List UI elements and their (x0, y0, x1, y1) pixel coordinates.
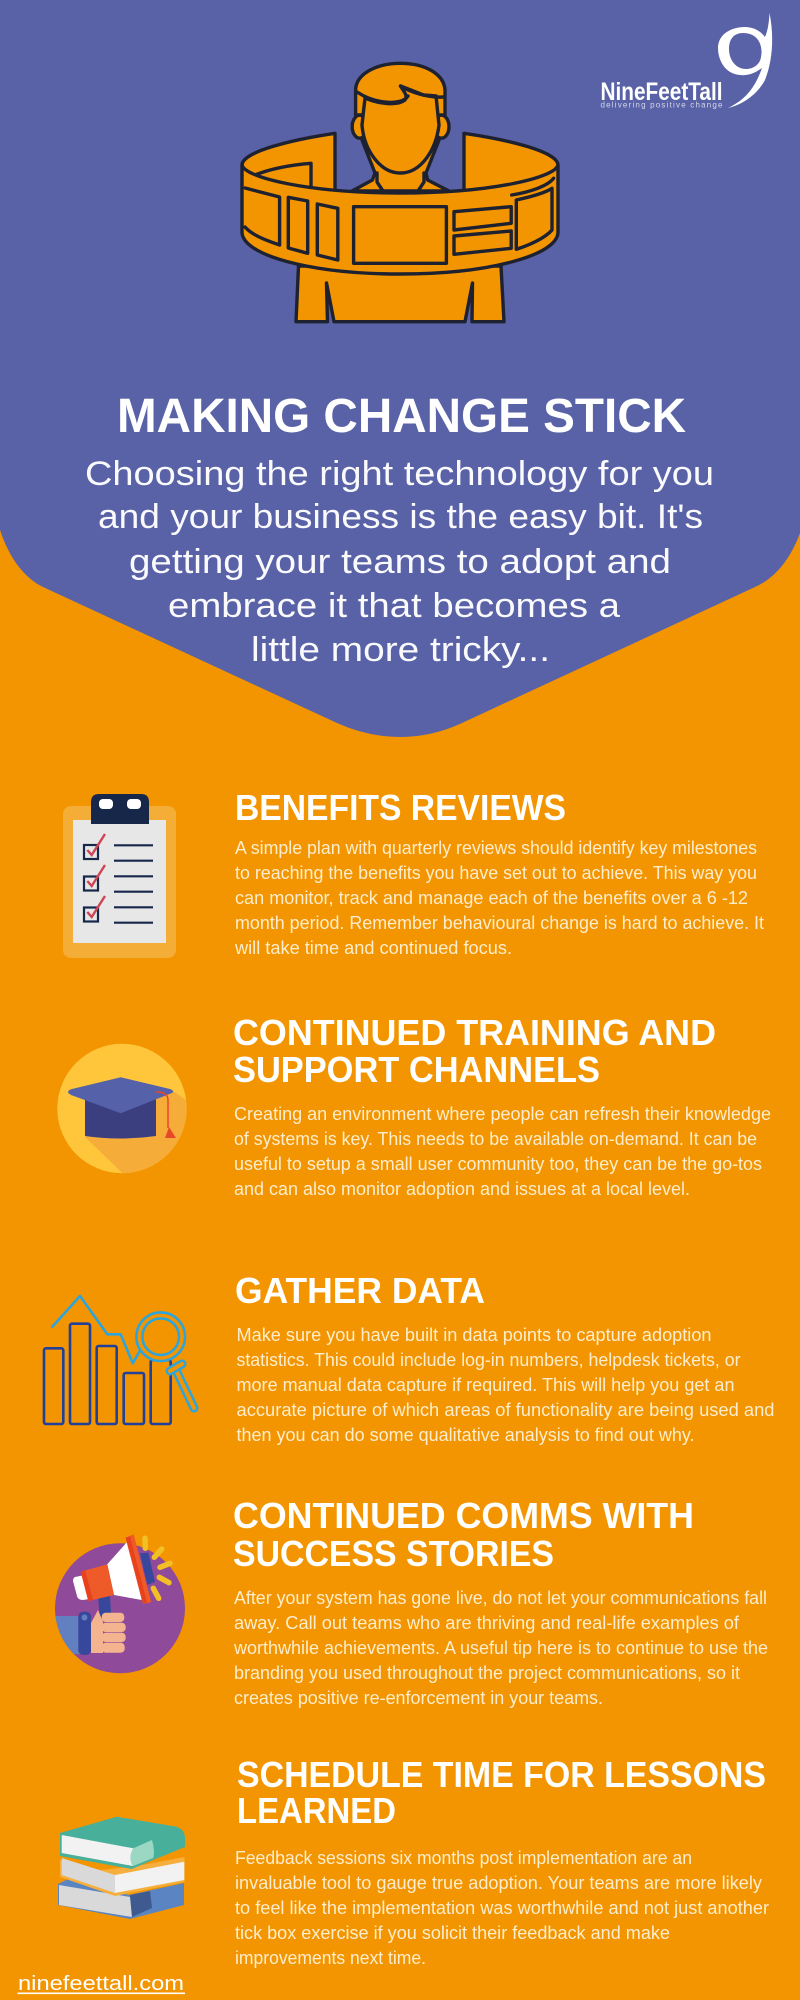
body text: accurate picture of which areas of functionality are being used and (236, 1400, 774, 1420)
panel: schedule time for lessons learned (58, 1754, 769, 1968)
body text: useful to setup a small user community too, they can be the go-tos (234, 1154, 762, 1174)
heading: SUPPORT CHANNELS (233, 1049, 600, 1090)
body text: more manual data capture if required. This will help you get an (236, 1375, 734, 1395)
panel: gather data (44, 1270, 774, 1445)
body text: will take time and continued focus. (234, 938, 512, 958)
body text: away. Call out teams who are thriving and real-life examples of (234, 1613, 740, 1633)
body text: of systems is key. This needs to be available on-demand. It can be (234, 1129, 757, 1149)
body text: invaluable tool to gauge true adoption. Your teams are more likely (235, 1873, 762, 1893)
body text: then you can do some qualitative analysis to find out why. (236, 1425, 694, 1445)
body text: Make sure you have built in data points to capture adoption (236, 1325, 712, 1345)
body text: month period. Remember behavioural change is hard to achieve. It (235, 913, 764, 933)
panel: hero header shape (0, 0, 800, 737)
icon: megaphone in hand (50, 1535, 185, 1673)
website link: ninefeettall.com (18, 1973, 184, 1995)
body text (235, 1848, 769, 1968)
icon: clipboard checklist (63, 794, 176, 958)
body text: After your system has gone live, do not let your communications fall (234, 1588, 767, 1608)
subtitle text block (85, 455, 714, 669)
body text: statistics. This could include log-in numbers, helpdesk tickets, or (236, 1350, 740, 1370)
subtitle text block: Choosing the right technology for you (85, 455, 714, 493)
body text: and can also monitor adoption and issues at a local level. (234, 1179, 690, 1199)
heading: SUCCESS STORIES (233, 1533, 554, 1574)
panel: continued comms with success stories (50, 1495, 768, 1708)
heading (233, 1012, 716, 1090)
body text (233, 1588, 768, 1708)
heading: CONTINUED COMMS WITH (233, 1495, 694, 1536)
body text (234, 838, 764, 958)
body text: Feedback sessions six months post implementation are an (235, 1848, 692, 1868)
panel: benefits reviews (63, 787, 764, 958)
logo: Nine Feet Tall: delivering positive change (600, 101, 723, 110)
subtitle text block: getting your teams to adopt and (129, 543, 671, 581)
heading (233, 1495, 694, 1574)
body text: to feel like the implementation was worthwhile and not just another (235, 1898, 769, 1918)
subtitle text block: little more tricky... (251, 631, 550, 669)
icon: bar chart with magnifier (44, 1296, 194, 1424)
subtitle text block: embrace it that becomes a (168, 587, 620, 625)
body text: can monitor, track and manage each of the benefits over a 6 -12 (235, 888, 748, 908)
body text: tick box exercise if you solicit their feedback and make (235, 1923, 670, 1943)
logo: Nine Feet Tall (600, 13, 772, 110)
subtitle text block: and your business is the easy bit. It's (98, 498, 703, 536)
panel: continued training and support channels (57, 1012, 771, 1199)
body text (234, 1104, 771, 1199)
title: MAKING CHANGE STICK (117, 390, 686, 443)
icon: stack of books (58, 1817, 185, 1919)
body text (236, 1325, 774, 1445)
heading: BENEFITS REVIEWS (235, 787, 566, 828)
body text: branding you used throughout the project communications, so it (234, 1663, 740, 1683)
body text: creates positive re-enforcement in your teams. (234, 1688, 603, 1708)
icon: person surrounded by a wrap-around screen (242, 63, 558, 322)
heading: GATHER DATA (235, 1270, 485, 1311)
heading (237, 1754, 766, 1831)
body text: A simple plan with quarterly reviews should identify key milestones (235, 838, 757, 858)
body text: worthwhile achievements. A useful tip here is to continue to use the (233, 1638, 768, 1658)
body text: to reaching the benefits you have set out to achieve. This way you (235, 863, 757, 883)
body text: improvements next time. (235, 1948, 426, 1968)
logo: Nine Feet Tall: NineFeetTall (600, 78, 722, 106)
icon: graduation cap (57, 1044, 187, 1174)
heading: SCHEDULE TIME FOR LESSONS (237, 1754, 766, 1795)
heading: LEARNED (237, 1790, 396, 1831)
heading: CONTINUED TRAINING AND (233, 1012, 716, 1053)
body text: Creating an environment where people can refresh their knowledge (234, 1104, 771, 1124)
